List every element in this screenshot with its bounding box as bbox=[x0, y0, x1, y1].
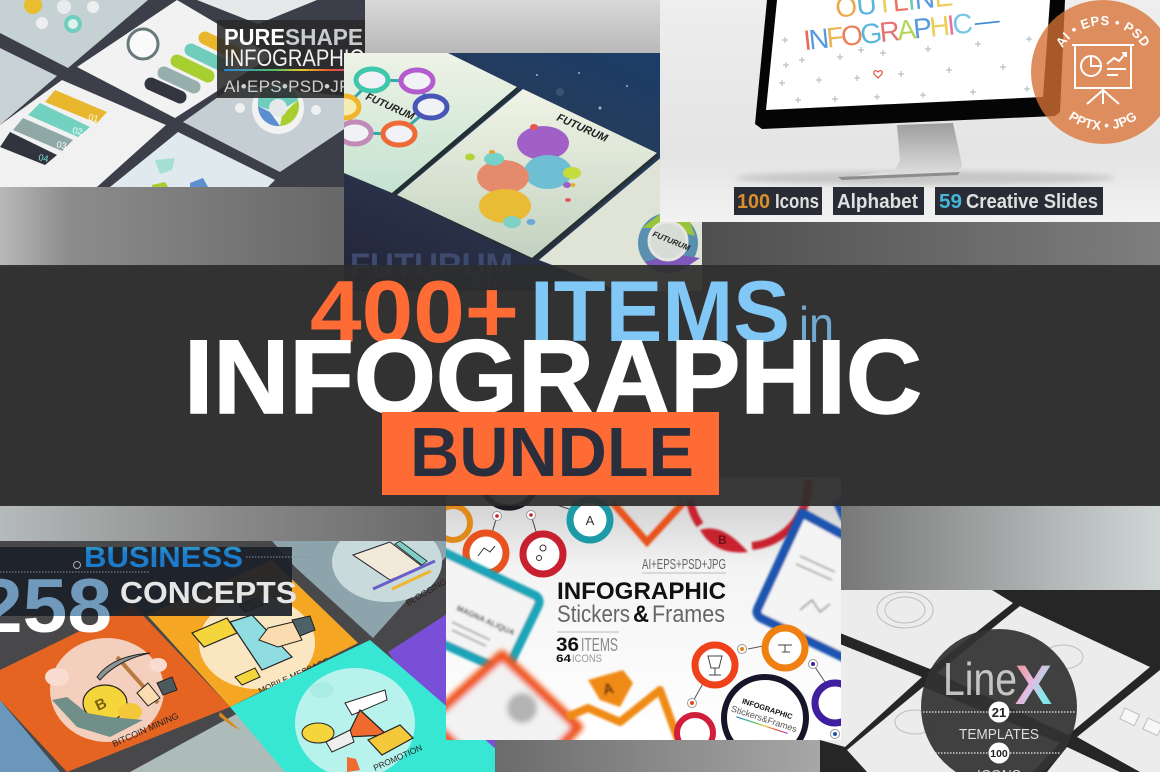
tag: 100 Icons: Icons bbox=[775, 191, 819, 213]
slide: bitcoin mining: BITCOIN MINING bbox=[111, 711, 180, 749]
heading: Stickers and Frames: 64 bbox=[556, 653, 572, 665]
slide: numbered strips: 03 bbox=[56, 139, 67, 151]
tag: 59 Creative Slides: Creative Slides bbox=[966, 191, 1098, 213]
slide: bitcoin mining: B bbox=[93, 695, 110, 715]
slide: blue left card bbox=[0, 700, 310, 772]
sticker rings top: A bbox=[586, 513, 595, 528]
heading: Stickers and Frames: & bbox=[633, 601, 649, 628]
title: Infographic: INFOGRAPHIC bbox=[184, 319, 922, 436]
tag: 59 Creative Slides bbox=[935, 187, 1103, 215]
label box: PureShape: INFOGRAPHIC bbox=[224, 45, 364, 72]
slide: numbered strips: 04 bbox=[38, 152, 49, 164]
sticker rings bottom right bbox=[677, 628, 855, 759]
LineX badge: Line bbox=[943, 653, 1017, 705]
slide: mobile message bbox=[147, 560, 358, 730]
frame: teal bbox=[446, 546, 546, 668]
slide: promotion bbox=[230, 640, 520, 772]
heading: Stickers and Frames bbox=[556, 556, 726, 665]
slide: blogging: BLOGGING bbox=[404, 576, 448, 608]
panel: Futurum bbox=[344, 53, 702, 267]
title: Bundle box: BUNDLE bbox=[410, 413, 694, 491]
heading: Stickers and Frames: AI+EPS+PSD+JPG bbox=[642, 556, 726, 573]
slide: cycle ring: FUTURUM bbox=[651, 230, 692, 253]
panel: PureShape infographics bbox=[0, 0, 365, 187]
LineX badge: 100 bbox=[990, 748, 1008, 760]
monitor frame bbox=[755, 0, 1065, 129]
slide: top left cards bbox=[0, 0, 317, 125]
label box: PureShape: SHAPE bbox=[285, 24, 363, 50]
Futurum wordmark bbox=[352, 254, 511, 265]
slide: cycle ring bbox=[539, 150, 702, 291]
frame: teal: MAGNA ALIQUA bbox=[455, 604, 516, 637]
stars bbox=[536, 72, 628, 110]
heading: Stickers and Frames: 36 bbox=[556, 635, 579, 656]
frame: orange zigzag with tag bbox=[567, 670, 680, 745]
tag: 100 Icons bbox=[734, 187, 822, 215]
LineX badge: 21 bbox=[992, 705, 1006, 720]
title: 400+ Items in bbox=[310, 262, 834, 361]
title box bbox=[0, 547, 292, 616]
frame: blue bbox=[757, 500, 880, 675]
top blurred rings bbox=[436, 480, 808, 553]
Futurum wordmark: FUTURUM bbox=[350, 247, 513, 285]
heading: Stickers and Frames: Frames bbox=[652, 601, 725, 628]
LineX badge bbox=[921, 629, 1077, 772]
slide diagrams bbox=[877, 592, 1160, 736]
frame: orange zigzag with tag: A bbox=[601, 680, 616, 699]
title: 400+ Items in: 400+ bbox=[310, 262, 519, 361]
slide: mobile message: MOBILE MESSAGE bbox=[257, 655, 331, 696]
slide: ring chain bbox=[331, 53, 519, 195]
panel: LineX bbox=[820, 590, 1160, 772]
slide: promotion: PROMOTION bbox=[372, 742, 424, 772]
monitor stand bbox=[838, 123, 962, 180]
dotted rules bbox=[0, 557, 310, 572]
format badge: AI • EPS • PSD bbox=[1057, 16, 1149, 48]
panel: Outline infographic monitor bbox=[660, 0, 1160, 222]
sticker rings top bbox=[466, 500, 610, 574]
slide: numbered strips: 02 bbox=[72, 125, 83, 137]
tag: 100 Icons: 100 bbox=[737, 191, 770, 213]
slide: cycle and map bbox=[110, 82, 365, 187]
title: 400+ Items in: ITEMS bbox=[530, 264, 790, 360]
panel: Stickers and frames bbox=[446, 503, 841, 740]
heading: Stickers and Frames: INFOGRAPHIC bbox=[557, 578, 726, 605]
heading: Stickers and Frames: ITEMS bbox=[581, 635, 618, 655]
label box: PureShape bbox=[217, 20, 365, 98]
LineX badge: TEMPLATES bbox=[959, 726, 1039, 743]
floor shadow bbox=[735, 171, 1115, 185]
slide: bubbles bbox=[397, 89, 658, 261]
sticker rings bottom right: INFOGRAPHIC bbox=[741, 696, 794, 721]
slide: centre pills bbox=[77, 0, 272, 118]
sticker rings bottom right: Stickers&Frames bbox=[730, 704, 799, 734]
slide: numbered strips bbox=[0, 80, 166, 187]
screen title bbox=[805, 0, 1000, 50]
Futurum wordmark: SUPERB ROUND INFOGRAPHIC bbox=[350, 280, 512, 290]
format badge bbox=[1031, 0, 1160, 144]
title: 400+ Items in: in bbox=[799, 297, 834, 353]
slide cards bbox=[820, 590, 1160, 772]
panel: Business concepts bbox=[0, 541, 495, 772]
screen title: INFOGRAPHIC bbox=[802, 7, 974, 56]
slide: ring chain: FUTURUM bbox=[364, 91, 416, 123]
slide: purple card bbox=[388, 614, 495, 748]
slide: bitcoin mining bbox=[0, 605, 230, 772]
format badge: PPTX • JPG bbox=[1068, 111, 1136, 130]
text: Business 258 Concepts: BUSINESS bbox=[84, 542, 243, 574]
slide: numbered strips: 01 bbox=[88, 112, 99, 124]
tag: 59 Creative Slides: 59 bbox=[939, 191, 962, 213]
frame: orange blurred bbox=[430, 655, 578, 772]
heading: Stickers and Frames: Stickers bbox=[557, 601, 630, 628]
central dark band bbox=[0, 265, 1160, 506]
label box: PureShape: AI•EPS•PSD•JPG bbox=[224, 77, 364, 96]
tag: Alphabet: Alphabet bbox=[837, 191, 918, 213]
panel: Stickers and frames: B bbox=[718, 533, 727, 547]
heading: Stickers and Frames: ICONS bbox=[572, 653, 602, 665]
slide: blogging bbox=[272, 541, 446, 638]
text: Business 258 Concepts: CONCEPTS bbox=[120, 575, 297, 610]
label box: PureShape: PURE bbox=[224, 24, 285, 50]
text: Business 258 Concepts bbox=[0, 546, 296, 632]
LineX badge: X bbox=[1015, 653, 1052, 716]
slide: bubbles: FUTURUM bbox=[555, 112, 610, 145]
